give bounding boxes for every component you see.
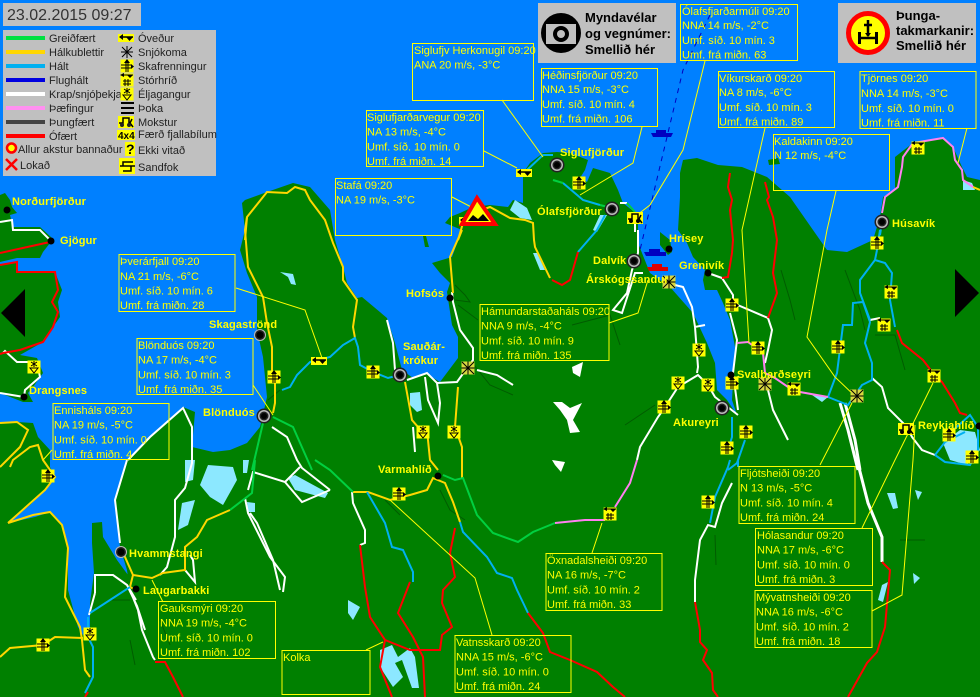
icon: skafrenningur [572, 176, 586, 190]
weather station box: Öxnadalsheiði [546, 554, 662, 611]
icon: skafrenningur [702, 495, 715, 508]
legend: road conditions: Hált [49, 61, 69, 73]
legend panel [3, 30, 217, 176]
weather station box: Ennisháls [53, 404, 169, 461]
legend: road conditions: Þungfært [49, 117, 94, 129]
snow patches [552, 362, 583, 472]
legend: road conditions [6, 33, 123, 172]
icon: éljagangur [702, 378, 714, 392]
weight panel text: Smellið hér [896, 38, 966, 53]
weather station box: Fljótsheiði: Fljótsheiði 09:20 [740, 468, 820, 480]
camera panel text [585, 10, 671, 57]
weather station box: Vatnsskarð [455, 636, 571, 693]
place names: Hrísey [669, 233, 704, 245]
date stamp [3, 3, 141, 26]
icon: skafrenningur [752, 341, 765, 354]
marker: Akureyri camera [714, 400, 730, 416]
legend: road conditions: Hálkublettir [49, 47, 104, 59]
place names: Drangsnes [29, 385, 87, 397]
weather station box: Kaldakinn: N 12 m/s, -4°C [774, 150, 846, 162]
camera panel text: Smellið hér [585, 42, 655, 57]
legend: weather symbols: ? [126, 141, 135, 157]
weather station box: Mývatnsheiði: Mývatnsheiði 09:20 [756, 592, 851, 604]
weather station box: Ennisháls: Umf. síð. 10 mín. 0 [54, 434, 147, 446]
weather station box: Öxnadalsheiði: Umf. frá miðn. 33 [547, 599, 631, 611]
weather station box: Ólafsfjarðarmúli [680, 4, 798, 62]
weather station box: Héðinsfjörður [542, 68, 658, 126]
icon: ferry Hrísey blue [644, 249, 666, 256]
weather station box: Tjörnes: Umf. frá miðn. 11 [861, 118, 945, 130]
weather station box: Víkurskarð: Víkurskarð 09:20 [719, 73, 802, 85]
weather station box: Þverárfjall: Umf. frá miðn. 28 [120, 300, 204, 312]
icon: stórhríð [877, 318, 890, 332]
weather station box: Ólafsfjarðarmúli: Ólafsfjarðarmúli 09:20 [682, 5, 790, 18]
icon: snjókoma [462, 362, 474, 374]
place names: Blönduós [203, 407, 255, 419]
weather station box: Víkurskarð: NA 8 m/s, -6°C [719, 87, 792, 99]
marker: Skagaströnd camera [254, 329, 266, 341]
town dots [4, 206, 980, 592]
icon: éljagangur [28, 360, 40, 374]
weather station box: Hólasandur [756, 528, 872, 586]
icon: snjókoma [662, 276, 676, 288]
weight panel text [896, 8, 974, 53]
legend: weather symbols: Færð fjallabílum [138, 129, 217, 141]
legend: road conditions: Ófært [49, 130, 77, 143]
legend: weather symbols: Þoka [138, 103, 164, 115]
weather station box: Ólafsfjarðarmúli: Umf. frá miðn. 63 [682, 50, 766, 62]
place names: krókur [403, 355, 439, 367]
weather station box: Tjörnes [860, 72, 976, 130]
icon: óveður [311, 357, 327, 365]
weather station box: Ólafsfjarðarmúli: Umf. síð. 10 mín. 3 [682, 35, 775, 47]
weather station box: Gauksmýri: NNA 19 m/s, -4°C [160, 618, 247, 630]
weather station box: Siglufjarðarvegur: NA 13 m/s, -4°C [367, 126, 446, 138]
place names: Húsavík [892, 218, 936, 230]
weather station box: Héðinsfjörður: NNA 15 m/s, -3°C [542, 84, 629, 96]
place names [12, 147, 975, 597]
weather station box: Kolka: Kolka [283, 652, 311, 664]
place names: Sauðár- [403, 341, 445, 353]
land: small island [768, 158, 780, 165]
weather station box: Kaldakinn [774, 134, 890, 190]
roads: red ófært [0, 173, 967, 697]
weather station box: Öxnadalsheiði: Öxnadalsheiði 09:20 [547, 555, 647, 567]
icon: éljagangur [692, 344, 706, 356]
date stamp: 23.02.2015 09:27 [7, 7, 132, 24]
icon: stórhríð [927, 369, 940, 382]
weather station box: Héðinsfjörður: Umf. síð. 10 mín. 4 [542, 99, 635, 111]
camera panel [538, 3, 676, 63]
marker: Húsavík camera [874, 214, 890, 230]
weather station box: Kolka [282, 650, 370, 694]
weather station box: Siglufjarðarvegur [366, 110, 484, 168]
weather station box: Blönduós: Umf. síð. 10 mín. 3 [138, 370, 231, 382]
icon: skafrenningur [726, 298, 739, 312]
icon: éljagangur [672, 376, 684, 390]
icon: ferry Sæfari [651, 130, 673, 137]
weather station box: Hámundarstaðaháls [480, 304, 610, 362]
weather station box: Kaldakinn: Kaldakinn 09:20 [774, 136, 853, 148]
arrow: previous map [1, 289, 25, 337]
marker: Blönduós camera [256, 408, 272, 424]
weather station box: Víkurskarð: Umf. síð. 10 mín. 3 [719, 102, 812, 114]
weather station box: Hámundarstaðaháls: Umf. frá miðn. 135 [481, 350, 571, 362]
legend: road conditions: Lokað [20, 160, 50, 172]
leader lines [43, 61, 967, 650]
weather station box: Mývatnsheiði: NNA 16 m/s, -6°C [756, 606, 843, 618]
weather station box: Héðinsfjörður: Umf. frá miðn. 106 [542, 114, 632, 126]
weather station box: Siglufjarðarvegur: Siglufjarðarvegur 09:20 [367, 112, 481, 124]
weather station box: Mývatnsheiði: Umf. síð. 10 mín. 2 [756, 622, 849, 634]
marker: Sauðárkrókur camera [392, 368, 408, 382]
icon: skafrenningur [366, 365, 380, 378]
weather station box: Ólafsfjarðarmúli: NNA 14 m/s, -2°C [682, 20, 769, 32]
weight restrictions panel [838, 3, 976, 63]
weather station box: Tjörnes: Umf. síð. 10 mín. 0 [861, 103, 954, 115]
icon: skafrenningur [870, 236, 884, 250]
legend: road conditions: Greiðfært [49, 33, 95, 45]
place names: Siglufjörður [560, 147, 625, 159]
weather station box: Hólasandur: Hólasandur 09:20 [757, 530, 844, 542]
icon: stórhríð [787, 382, 800, 396]
weather station box: Fljótsheiði: Umf. frá miðn. 24 [740, 512, 824, 524]
icon: stórhríð [603, 507, 616, 520]
weather station box: Siglufjarðarvegur: Umf. frá miðn. 14 [367, 156, 451, 168]
roads: white krap [0, 203, 935, 660]
marker: Hvammstangi camera [115, 546, 127, 558]
town markers [4, 158, 980, 592]
icon: skafrenningur [268, 370, 281, 384]
marker: Ólafsfjörður camera [604, 202, 620, 216]
marker: Dalvík camera [626, 254, 642, 268]
icon: skafrenningur [966, 450, 979, 464]
place names: Árskógssandur [586, 273, 669, 286]
arrow: next map [955, 269, 979, 317]
weather station box: Þverárfjall: Þverárfjall 09:20 [120, 256, 200, 268]
icon: skafrenningur [658, 400, 671, 414]
legend: road conditions: Krap/snjóþekja [49, 89, 123, 101]
weight panel text: Þunga- [896, 8, 940, 23]
weather station box: Siglufjv Herkonugil: Siglufjv Herkonugil 09:20 [414, 45, 536, 57]
road markers [28, 141, 979, 652]
camera panel text: og vegnúmer: [585, 26, 671, 41]
land: Hrísey island [660, 232, 672, 255]
weather station box: Mývatnsheiði: Umf. frá miðn. 18 [756, 636, 840, 648]
weather station box: Blönduós [137, 338, 253, 396]
icon: óveður [459, 217, 475, 225]
icon: skafrenningur [42, 469, 55, 482]
weather station box: Mývatnsheiði [755, 590, 872, 648]
place names: Varmahlíð [378, 464, 432, 476]
icon: skafrenningur [720, 441, 734, 454]
place names: Svalbarðseyri [737, 369, 811, 381]
legend: weather symbols: Óveður [138, 32, 174, 45]
icon: éljagangur [448, 426, 460, 438]
weather station box: Fljótsheiði: Umf. síð. 10 mín. 4 [740, 498, 833, 510]
weather station box: Stafá [336, 178, 452, 236]
place names: Dalvík [593, 255, 627, 267]
weather station box: Fljótsheiði [739, 466, 855, 524]
weather station box: Siglufjv Herkonugil [412, 44, 536, 100]
rivers [112, 270, 925, 665]
weight panel text: takmarkanir: [896, 23, 974, 38]
icon: stórhríð [884, 285, 898, 298]
legend: road conditions: Allur akstur bannaður [18, 144, 123, 156]
roads: green greiðfært [230, 180, 635, 542]
weather station box: Hámundarstaðaháls: Umf. síð. 10 mín. 9 [481, 336, 574, 348]
roads: cyan hált [85, 155, 978, 693]
legend: weather symbols [117, 32, 217, 174]
weather station box: Víkurskarð: Umf. frá miðn. 89 [719, 116, 803, 128]
weather station box: Þverárfjall: NA 21 m/s, -6°C [120, 271, 199, 283]
legend: road conditions: Þæfingur [49, 103, 94, 115]
icon: skafrenningur [942, 428, 956, 442]
weather station box: Öxnadalsheiði: Umf. síð. 10 mín. 2 [547, 584, 640, 596]
weather station box: Tjörnes: Tjörnes 09:20 [861, 73, 928, 85]
place names: Ólafsfjörður [537, 205, 602, 218]
weather station box: Þverárfjall: Umf. síð. 10 mín. 6 [120, 286, 213, 298]
icon: mokstur [898, 423, 914, 435]
weather station box: Ennisháls: Ennisháls 09:20 [54, 405, 132, 417]
icon: mokstur [627, 212, 643, 224]
weather station box: Siglufjarðarvegur: Umf. síð. 10 mín. 0 [367, 142, 460, 154]
icon: óveður [516, 169, 532, 177]
icon: snjókoma [850, 390, 864, 402]
weather station box: Gauksmýri [158, 602, 276, 659]
place names: Gjögur [60, 235, 98, 247]
weather station box: Hámundarstaðaháls: Hámundarstaðaháls 09:20 [481, 306, 610, 318]
land: Strandir [0, 262, 62, 402]
icon: skafrenningur [832, 340, 845, 354]
legend: weather symbols: Stórhríð [138, 75, 177, 87]
weather station box: Öxnadalsheiði: NA 16 m/s, -7°C [547, 570, 626, 582]
ferries [644, 130, 673, 271]
roads: pink þæfingur [555, 138, 973, 523]
place names: Norðurfjörður [12, 196, 87, 208]
legend: weather symbols: Ekki vitað [138, 145, 185, 157]
weather station box: Héðinsfjörður: Héðinsfjörður 09:20 [542, 70, 638, 82]
icon: skafrenningur [726, 376, 739, 390]
icon: éljagangur [416, 426, 430, 438]
roads: yellow hálkublettir [0, 187, 980, 677]
land: Norðurfjörður and Gjögur [0, 193, 52, 262]
lakes [178, 180, 980, 688]
legend: weather symbols: Snjókoma [138, 47, 188, 59]
icon: camera [541, 13, 581, 53]
weather station box: Vatnsskarð: Vatnsskarð 09:20 [456, 637, 541, 649]
weather station box: Ennisháls: Umf. frá miðn. 4 [54, 449, 132, 461]
icon: skafrenningur [36, 638, 50, 652]
place names: Reykjahlíð [918, 420, 975, 432]
weather station box: Gauksmýri: Gauksmýri 09:20 [160, 603, 243, 615]
camera panel text: Myndavélar [585, 10, 657, 25]
weather station box: Blönduós: Umf. frá miðn. 35 [138, 384, 222, 396]
weather station box: Blönduós: NA 17 m/s, -4°C [138, 354, 217, 366]
legend: weather symbols: Mokstur [138, 117, 177, 129]
place names: Akureyri [673, 417, 719, 429]
legend: weather symbols: 4x4 [118, 131, 135, 142]
icon: road closed warning triangle [462, 198, 495, 224]
legend: weather symbols: Éljagangur [138, 88, 191, 101]
weather station box: Þverárfjall [119, 254, 235, 312]
weather station box: Tjörnes: NNA 14 m/s, -3°C [861, 88, 948, 100]
weather station box: Siglufjv Herkonugil: ANA 20 m/s, -3°C [414, 60, 500, 72]
ferry route [640, 15, 710, 250]
weather station box: Hólasandur: Umf. síð. 10 mín. 0 [757, 560, 850, 572]
weather station box: Blönduós: Blönduós 09:20 [138, 340, 214, 352]
place names: Hofsós [406, 288, 444, 300]
legend: weather symbols: Sandfok [138, 162, 179, 174]
legend: weather symbols: Skafrenningur [138, 61, 207, 73]
weather station box: Vatnsskarð: Umf. síð. 10 mín. 0 [456, 666, 549, 678]
icon: ferry Hrísey red [647, 264, 668, 271]
weather station box: Stafá: NA 19 m/s, -3°C [336, 194, 415, 206]
icon: snjókoma [758, 378, 772, 390]
icon: éljagangur [84, 628, 96, 640]
weather station box: Ennisháls: NA 19 m/s, -5°C [54, 420, 133, 432]
marker: Siglufjörður camera [550, 158, 564, 172]
legend: road conditions: Flughált [49, 75, 88, 87]
weather station box: Gauksmýri: Umf. frá miðn. 102 [160, 647, 250, 659]
place names: Laugarbakki [143, 585, 209, 597]
weather station box: Vatnsskarð: Umf. frá miðn. 24 [456, 681, 540, 693]
place names: Hvammstangi [129, 548, 203, 560]
icon: stórhríð [911, 141, 924, 154]
weather station box: Fljótsheiði: N 13 m/s, -5°C [740, 482, 812, 494]
weather station box: Stafá: Stafá 09:20 [336, 180, 392, 192]
place names: Skagaströnd [209, 319, 277, 331]
weather station box: Hólasandur: NNA 17 m/s, -6°C [757, 544, 844, 556]
weather station box: Hámundarstaðaháls: NNA 9 m/s, -4°C [481, 320, 562, 332]
icon: axle weight sign [848, 14, 888, 52]
weather station box: Vatnsskarð: NNA 15 m/s, -6°C [456, 652, 543, 664]
land: Málmey island [423, 236, 429, 247]
icon: skafrenningur [392, 487, 406, 500]
place names: Grenivík [679, 260, 725, 272]
weather station box: Hólasandur: Umf. frá miðn. 3 [757, 574, 835, 586]
icon: skafrenningur [740, 425, 753, 438]
weather station box: Gauksmýri: Umf. síð. 10 mín. 0 [160, 632, 253, 644]
weather station box: Víkurskarð [718, 72, 834, 128]
